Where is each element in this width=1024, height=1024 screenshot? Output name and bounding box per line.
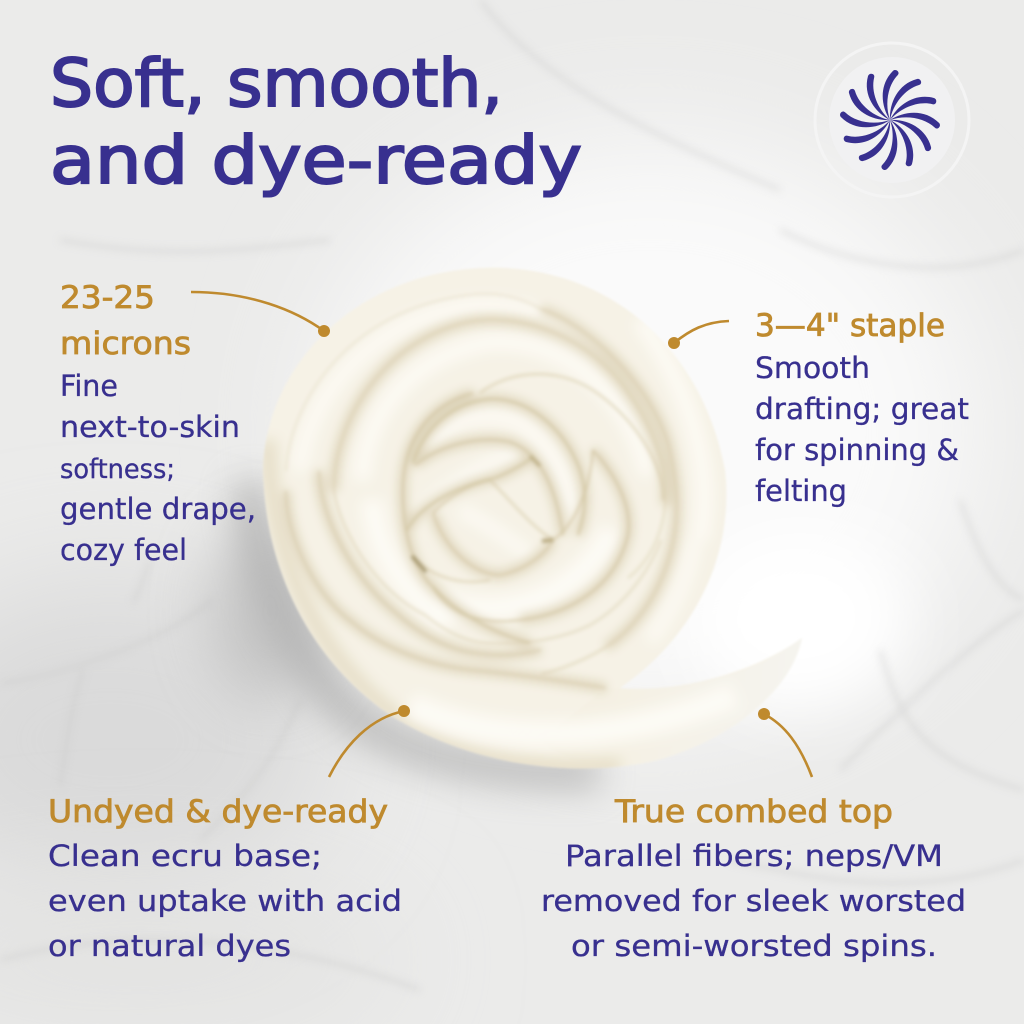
title: and dye-ready bbox=[50, 122, 582, 199]
arrow: staple connector bbox=[668, 321, 729, 349]
callout: staple: drafting; great bbox=[755, 392, 969, 426]
rope soft shadows bbox=[286, 309, 677, 688]
callout: combed top bbox=[541, 794, 966, 963]
icon: swirl bbox=[839, 69, 941, 171]
callout: undyed bbox=[48, 794, 402, 963]
callout: microns: next-to-skin bbox=[60, 410, 240, 444]
callout: staple: 3—4" staple bbox=[755, 308, 945, 344]
callout: staple: Smooth bbox=[755, 351, 870, 385]
title bbox=[50, 45, 582, 199]
callout: undyed: Undyed & dye-ready bbox=[48, 794, 388, 830]
callout: staple: for spinning & bbox=[755, 433, 959, 467]
rope creases inner bbox=[403, 374, 663, 643]
callout: staple: felting bbox=[755, 474, 847, 508]
callout: undyed: Clean ecru base; bbox=[48, 839, 322, 873]
callout: undyed: or natural dyes bbox=[48, 929, 291, 963]
callout: combed top: removed for sleek worsted bbox=[541, 884, 966, 918]
callout: microns: Fine bbox=[60, 369, 118, 403]
callout: microns: 23-25 bbox=[60, 280, 155, 316]
logo badge bbox=[815, 43, 969, 197]
callout: combed top: Parallel fibers; neps/VM bbox=[565, 839, 943, 873]
title: Soft, smooth, bbox=[50, 45, 503, 122]
arrow: combed top connector bbox=[758, 708, 812, 777]
callout: microns: softness; bbox=[60, 454, 175, 485]
rope highlights bbox=[300, 305, 735, 734]
arrow: microns connector bbox=[191, 292, 330, 337]
soft edge shading bbox=[268, 440, 620, 767]
callout: undyed: even uptake with acid bbox=[48, 884, 402, 918]
callout: microns: microns bbox=[60, 326, 191, 362]
dark accents bbox=[412, 456, 553, 572]
callout: microns bbox=[60, 280, 256, 567]
callout: microns: cozy feel bbox=[60, 533, 187, 567]
rope creases outer bbox=[286, 294, 677, 688]
wool shadow bbox=[210, 480, 600, 772]
tail tone bbox=[540, 638, 802, 766]
callout: combed top: True combed top bbox=[614, 794, 893, 830]
arrow: undyed connector bbox=[329, 705, 410, 777]
callout: microns: gentle drape, bbox=[60, 492, 256, 526]
callout: combed top: or semi-worsted spins. bbox=[571, 929, 937, 963]
callout: staple bbox=[755, 308, 969, 508]
wool roving ball bbox=[263, 268, 802, 768]
